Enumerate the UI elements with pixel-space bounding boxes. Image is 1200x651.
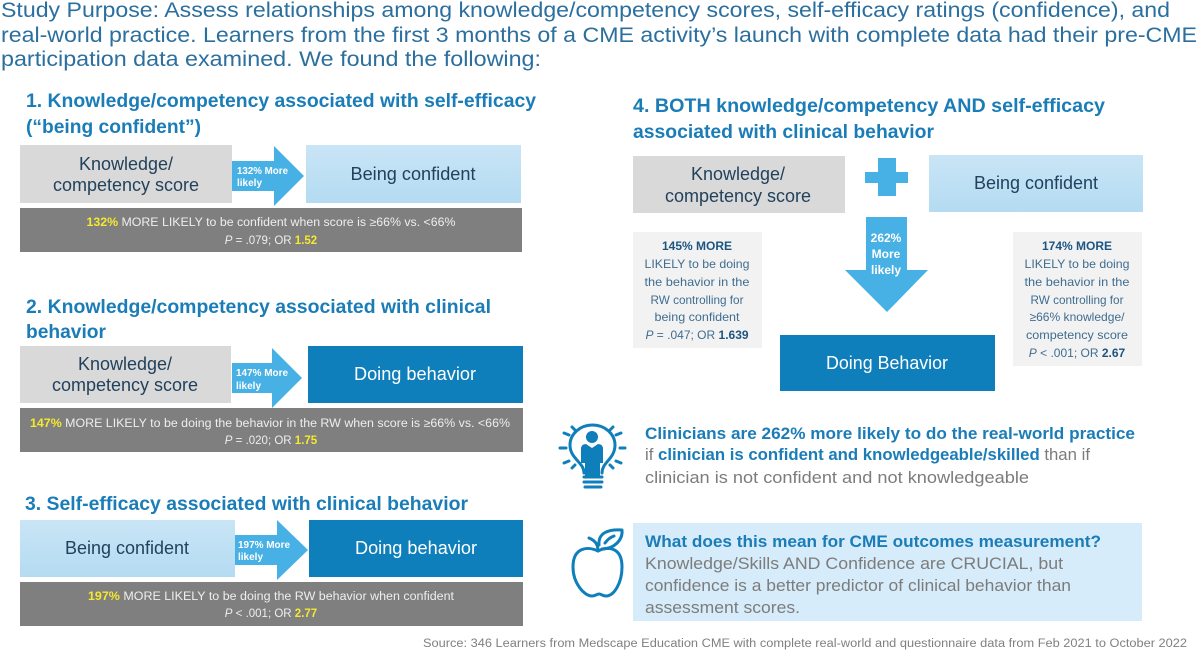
source note: Source: 346 Learners from Medscape Education CME with complete real-world and questionnaire data from Feb 2021 to October 2022 <box>423 638 1187 650</box>
arrow: 147% more likely: 147% More <box>236 368 288 379</box>
knowledge box: competency score <box>665 186 811 206</box>
key finding text: Clinicians are 262% more likely to do the real-world practice <box>645 424 1135 443</box>
study purpose heading: participation data examined. We found the following: <box>1 47 541 71</box>
callout: 145% more likely: P = .047; OR 1.639 <box>645 328 749 342</box>
being confident box <box>306 145 521 203</box>
result bar 3 <box>20 582 523 626</box>
callout: 145% more likely: RW controlling for <box>650 293 744 307</box>
callout: meaning for CME outcomes measurement: confidence is a better predictor of clinical behavior than <box>645 576 1071 595</box>
panel 2 heading: 2. Knowledge/competency associated with clinical <box>26 297 491 318</box>
doing behavior box <box>308 346 523 403</box>
being confident box: Being confident <box>974 173 1098 193</box>
result bar 2 <box>20 408 523 452</box>
arrow: 262% more likely: likely <box>871 263 901 277</box>
key finding text: if clinician is confident and knowledgeable/skilled than if <box>645 445 1090 464</box>
arrow: 197% more likely: likely <box>238 552 263 563</box>
doing behavior box <box>309 520 523 577</box>
callout: 174% more likely: 174% MORE <box>1042 239 1112 253</box>
panel 1 heading: (“being confident”) <box>26 117 201 138</box>
callout: meaning for CME outcomes measurement: Knowledge/Skills AND Confidence are CRUCIAL, but <box>645 554 1063 573</box>
being confident box <box>929 155 1143 212</box>
study purpose heading: real-world practice. Learners from the first 3 months of a CME activity’s launch with complete data had their pre-CME <box>1 23 1197 47</box>
knowledge box: competency score <box>52 375 198 395</box>
callout: 174% more likely: competency score <box>1026 328 1128 342</box>
result bar 2: 147% MORE LIKELY to be doing the behavior in the RW when score is ≥66% vs. <66% <box>30 418 510 430</box>
panel 2 heading: behavior <box>26 322 107 343</box>
icon: plus <box>865 158 908 196</box>
arrow: 147% more likely <box>232 348 302 408</box>
key finding text: clinician is not confident and not knowledgeable <box>645 468 1029 487</box>
callout: 145% more likely: LIKELY to be doing <box>644 257 750 271</box>
being confident box <box>20 520 235 577</box>
being confident box: Being confident <box>65 538 189 558</box>
study purpose heading <box>1 0 1197 71</box>
callout: 174% more likely <box>1013 232 1142 366</box>
callout: 174% more likely: P < .001; OR 2.67 <box>1029 346 1126 360</box>
callout: 174% more likely: the behavior in the <box>1024 275 1130 289</box>
panel 4 heading: 4. BOTH knowledge/competency AND self-efficacy <box>633 96 1105 117</box>
arrow: 132% more likely: 132% More <box>237 166 288 177</box>
knowledge box <box>20 145 232 203</box>
panel 4 heading <box>633 96 1105 143</box>
callout: 145% more likely <box>633 232 762 348</box>
arrow: 262% more likely <box>845 217 928 312</box>
callout: meaning for CME outcomes measurement: What does this mean for CME outcomes measurement? <box>645 532 1101 551</box>
arrow: 197% more likely <box>235 520 308 580</box>
doing behavior box: Doing behavior <box>355 538 477 558</box>
arrow: 197% more likely: 197% More <box>238 540 290 551</box>
result bar 1: 132% MORE LIKELY to be confident when score is ≥66% vs. <66% <box>86 217 455 229</box>
knowledge box: Knowledge/ <box>78 354 172 374</box>
result bar 3: P < .001; OR 2.77 <box>225 608 317 620</box>
result bar 1: P = .079; OR 1.52 <box>225 235 317 247</box>
arrow: 262% more likely: More <box>872 247 901 261</box>
callout: 145% more likely: 145% MORE <box>662 239 732 253</box>
callout: 174% more likely: ≥66% knowledge/ <box>1030 310 1125 324</box>
arrow: 147% more likely: likely <box>236 381 261 392</box>
knowledge box <box>20 346 231 403</box>
panel 4: both factors and clinical behavior <box>633 96 1143 391</box>
icon: apple <box>573 530 622 596</box>
callout: meaning for CME outcomes measurement <box>633 523 1142 621</box>
panel 3 heading: 3. Self-efficacy associated with clinical behavior <box>25 494 469 515</box>
panel 3: self-efficacy and clinical behavior <box>20 494 523 626</box>
callout: 145% more likely: the behavior in the <box>644 275 750 289</box>
doing behavior box: Doing behavior <box>354 364 476 384</box>
being confident box: Being confident <box>350 164 476 184</box>
icon: lightbulb with person <box>560 425 625 487</box>
panel 4 heading: associated with clinical behavior <box>633 122 935 143</box>
doing behavior box: Doing Behavior <box>826 353 948 373</box>
arrow: 262% more likely: 262% <box>871 231 902 245</box>
result bar 2: P = .020; OR 1.75 <box>225 435 318 447</box>
panel 1 heading: 1. Knowledge/competency associated with self-efficacy <box>26 91 536 112</box>
callout: 145% more likely: being confident <box>654 310 740 324</box>
callout: meaning for CME outcomes measurement: assessment scores. <box>645 598 800 617</box>
knowledge box: competency score <box>53 175 199 195</box>
knowledge box: Knowledge/ <box>79 154 173 174</box>
callout: 174% more likely: LIKELY to be doing <box>1024 257 1130 271</box>
result bar 1 <box>20 208 522 252</box>
panel 1 heading <box>26 91 536 138</box>
arrow: 132% more likely: likely <box>237 178 262 189</box>
arrow: 132% more likely <box>232 146 304 206</box>
doing behavior box <box>780 335 995 391</box>
callout: 174% more likely: RW controlling for <box>1030 293 1124 307</box>
panel 2 heading <box>26 297 491 343</box>
panel 1: knowledge and self-efficacy <box>20 91 536 252</box>
panel 2: knowledge and clinical behavior <box>20 297 523 452</box>
key finding text <box>645 424 1135 487</box>
knowledge box <box>633 156 845 213</box>
knowledge box: Knowledge/ <box>691 164 785 184</box>
result bar 3: 197% MORE LIKELY to be doing the RW behavior when confident <box>88 591 455 603</box>
